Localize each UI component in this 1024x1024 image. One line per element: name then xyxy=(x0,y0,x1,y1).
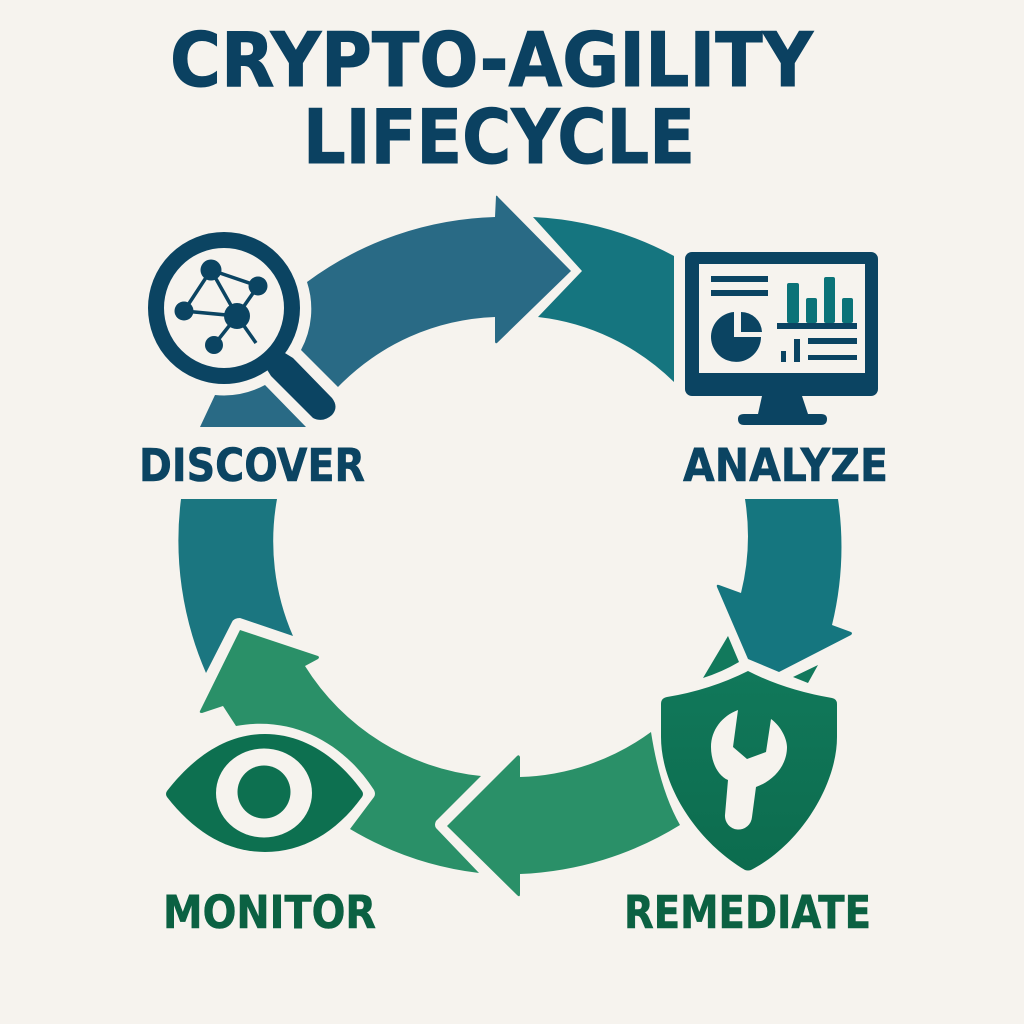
arrow segment: into analyze xyxy=(533,217,674,382)
icon: magnifying glass with network xyxy=(156,240,336,420)
title: CRYPTO-AGILITY xyxy=(170,16,815,104)
icon: shield with wrench xyxy=(661,671,837,870)
arrow segment: into discover xyxy=(178,499,293,673)
title: LIFECYCLE xyxy=(303,93,695,181)
label: analyze: ANALYZE xyxy=(683,439,888,492)
arrow: analyze to remediate xyxy=(717,499,852,672)
label: remediate: REMEDIATE xyxy=(624,886,871,939)
arrow remnants behind shield xyxy=(703,636,818,683)
arrow: remediate to monitor xyxy=(447,732,680,896)
arrow: discover to analyze xyxy=(200,196,571,427)
icon: monitor dashboard xyxy=(685,252,878,425)
arrow: monitor to discover xyxy=(200,630,481,873)
title xyxy=(170,16,815,181)
label: monitor: MONITOR xyxy=(163,886,376,939)
label: discover: DISCOVER xyxy=(139,439,365,492)
icon: eye xyxy=(166,734,363,852)
